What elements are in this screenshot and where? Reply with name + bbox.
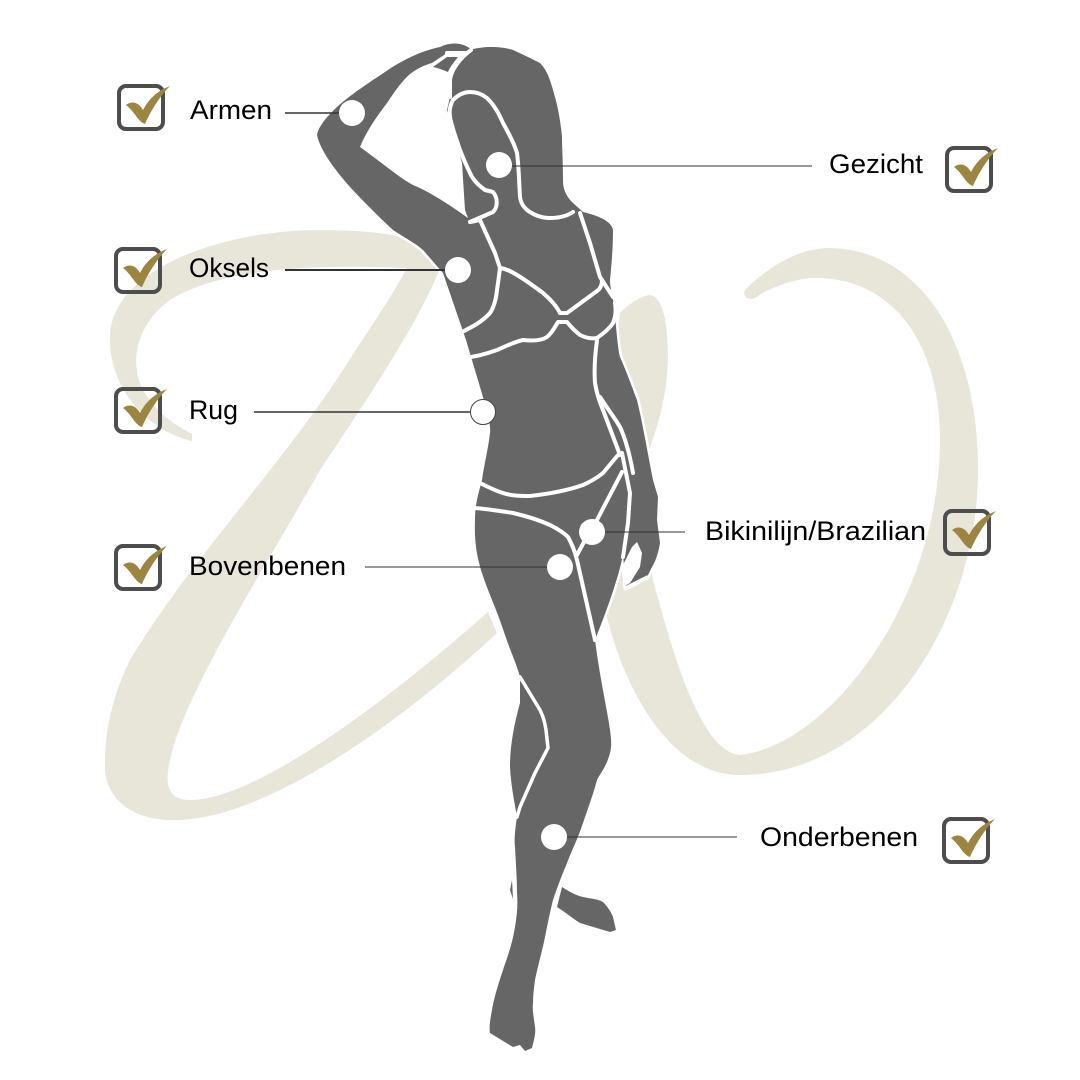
hand gap on hip <box>622 542 642 587</box>
marker: Onderbenen <box>541 824 737 850</box>
checkbox icon: Armen <box>119 86 170 129</box>
checkbox icon: Onderbenen <box>944 819 995 862</box>
background numeral 2 <box>105 230 497 820</box>
label: Armen: Armen <box>190 95 272 125</box>
marker: Rug <box>254 400 496 424</box>
marker: Bovenbenen <box>365 554 573 580</box>
back heel <box>510 880 513 899</box>
marker: Armen <box>285 100 365 126</box>
checkbox icon: Gezicht <box>947 148 998 191</box>
checkbox icon: Oksels <box>116 249 167 292</box>
marker: Bikinilijn/Brazilian <box>579 519 685 545</box>
body figure silhouette <box>317 43 660 1051</box>
label: Bikinilijn/Brazilian: Bikinilijn/Brazilian <box>705 516 926 546</box>
label: Oksels: Oksels <box>189 253 269 283</box>
label: Onderbenen: Onderbenen <box>760 822 918 852</box>
background numeral 0 <box>595 248 978 775</box>
main body <box>317 43 660 1051</box>
label: Gezicht: Gezicht <box>829 149 923 179</box>
label: Bovenbenen: Bovenbenen <box>189 551 346 581</box>
checkbox icon: Bovenbenen <box>116 546 167 589</box>
checkbox icon: Bikinilijn/Brazilian <box>945 511 996 554</box>
body contour lines <box>447 50 647 817</box>
marker: Oksels <box>285 257 471 283</box>
label: Rug: Rug <box>189 395 238 425</box>
back foot <box>557 887 616 932</box>
marker: Gezicht <box>486 152 812 178</box>
hand fingers <box>433 57 458 72</box>
checkbox icon: Rug <box>116 389 167 432</box>
